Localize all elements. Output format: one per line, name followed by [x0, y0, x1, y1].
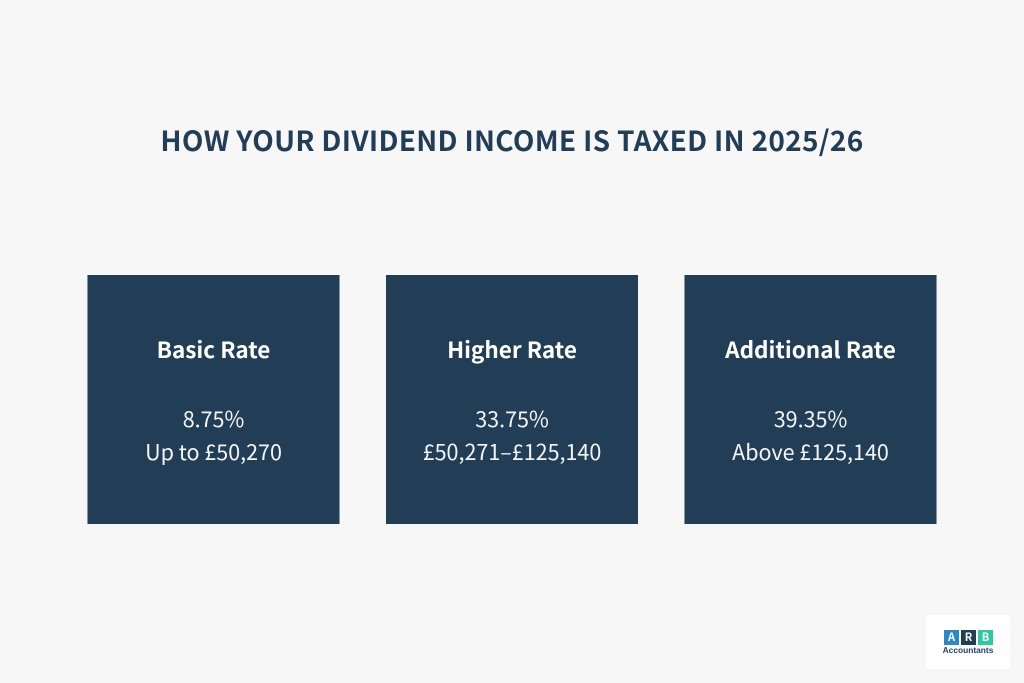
text: higher rate percentage: 33.75%: [475, 402, 549, 434]
logo: ARB Accountants: [926, 615, 1010, 669]
panel: higher rate: [386, 275, 638, 524]
text: basic rate percentage: 8.75%: [183, 402, 244, 434]
heading: additional rate: Additional Rate: [725, 333, 896, 365]
heading: higher rate: Higher Rate: [447, 333, 577, 365]
panel: additional rate: [685, 275, 936, 524]
logo square A: [944, 630, 959, 645]
title: HOW YOUR DIVIDEND INCOME IS TAXED IN 2025/26: [160, 120, 864, 160]
logo square R: R: [965, 629, 972, 645]
logo square B: B: [982, 629, 989, 645]
heading: basic rate: Basic Rate: [157, 333, 270, 365]
logo wordmark: Accountants: [943, 645, 993, 655]
logo square R: [961, 630, 976, 645]
text: higher rate band: £50,271–£125,140: [423, 436, 601, 466]
text: additional rate percentage: 39.35%: [774, 402, 847, 434]
panel: basic rate: [88, 275, 339, 524]
logo square B: [978, 630, 993, 645]
logo square A: A: [948, 629, 955, 645]
text: additional rate band: Above £125,140: [732, 436, 889, 466]
text: basic rate band: Up to £50,270: [145, 436, 282, 466]
